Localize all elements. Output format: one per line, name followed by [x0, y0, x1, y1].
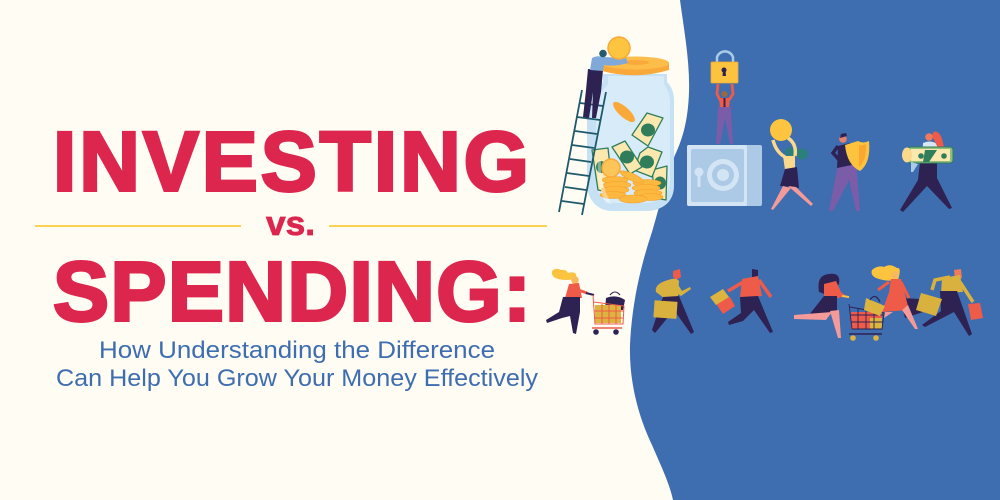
- subtitle: How Understanding the Difference: [99, 337, 495, 364]
- icon: safe: [687, 145, 762, 206]
- divider with vs. label: vs.: [266, 205, 315, 243]
- figure: person on ladder placing coin: [583, 37, 630, 118]
- figure: running shopper with two bags: [916, 269, 983, 336]
- figure: woman with dark hair and shopping cart: [794, 274, 884, 341]
- figure: woman carrying rolled banknote: [900, 132, 953, 212]
- subtitle: Can Help You Grow Your Money Effectively: [56, 365, 538, 392]
- figure: woman with shopping cart on cream background: [546, 269, 625, 335]
- figure: woman lifting coin: [770, 119, 813, 210]
- blue wave background panel: [630, 0, 1000, 500]
- figure: running shopper with yellow sweater: [652, 269, 694, 334]
- figure: running shopper with red sweater: [710, 269, 773, 333]
- title: INVESTING: INVESTING: [53, 114, 529, 208]
- icon: ladder: [559, 90, 606, 215]
- icon: money jar with coins and banknotes: [587, 56, 674, 211]
- figure: person holding padlock: [716, 84, 733, 144]
- figure: man with shield: [829, 133, 869, 211]
- icon: padlock: [711, 51, 738, 83]
- subtitle: [56, 337, 538, 392]
- figure: blonde woman in red dress with bags: [864, 265, 923, 329]
- title: SPENDING:: SPENDING:: [53, 244, 531, 338]
